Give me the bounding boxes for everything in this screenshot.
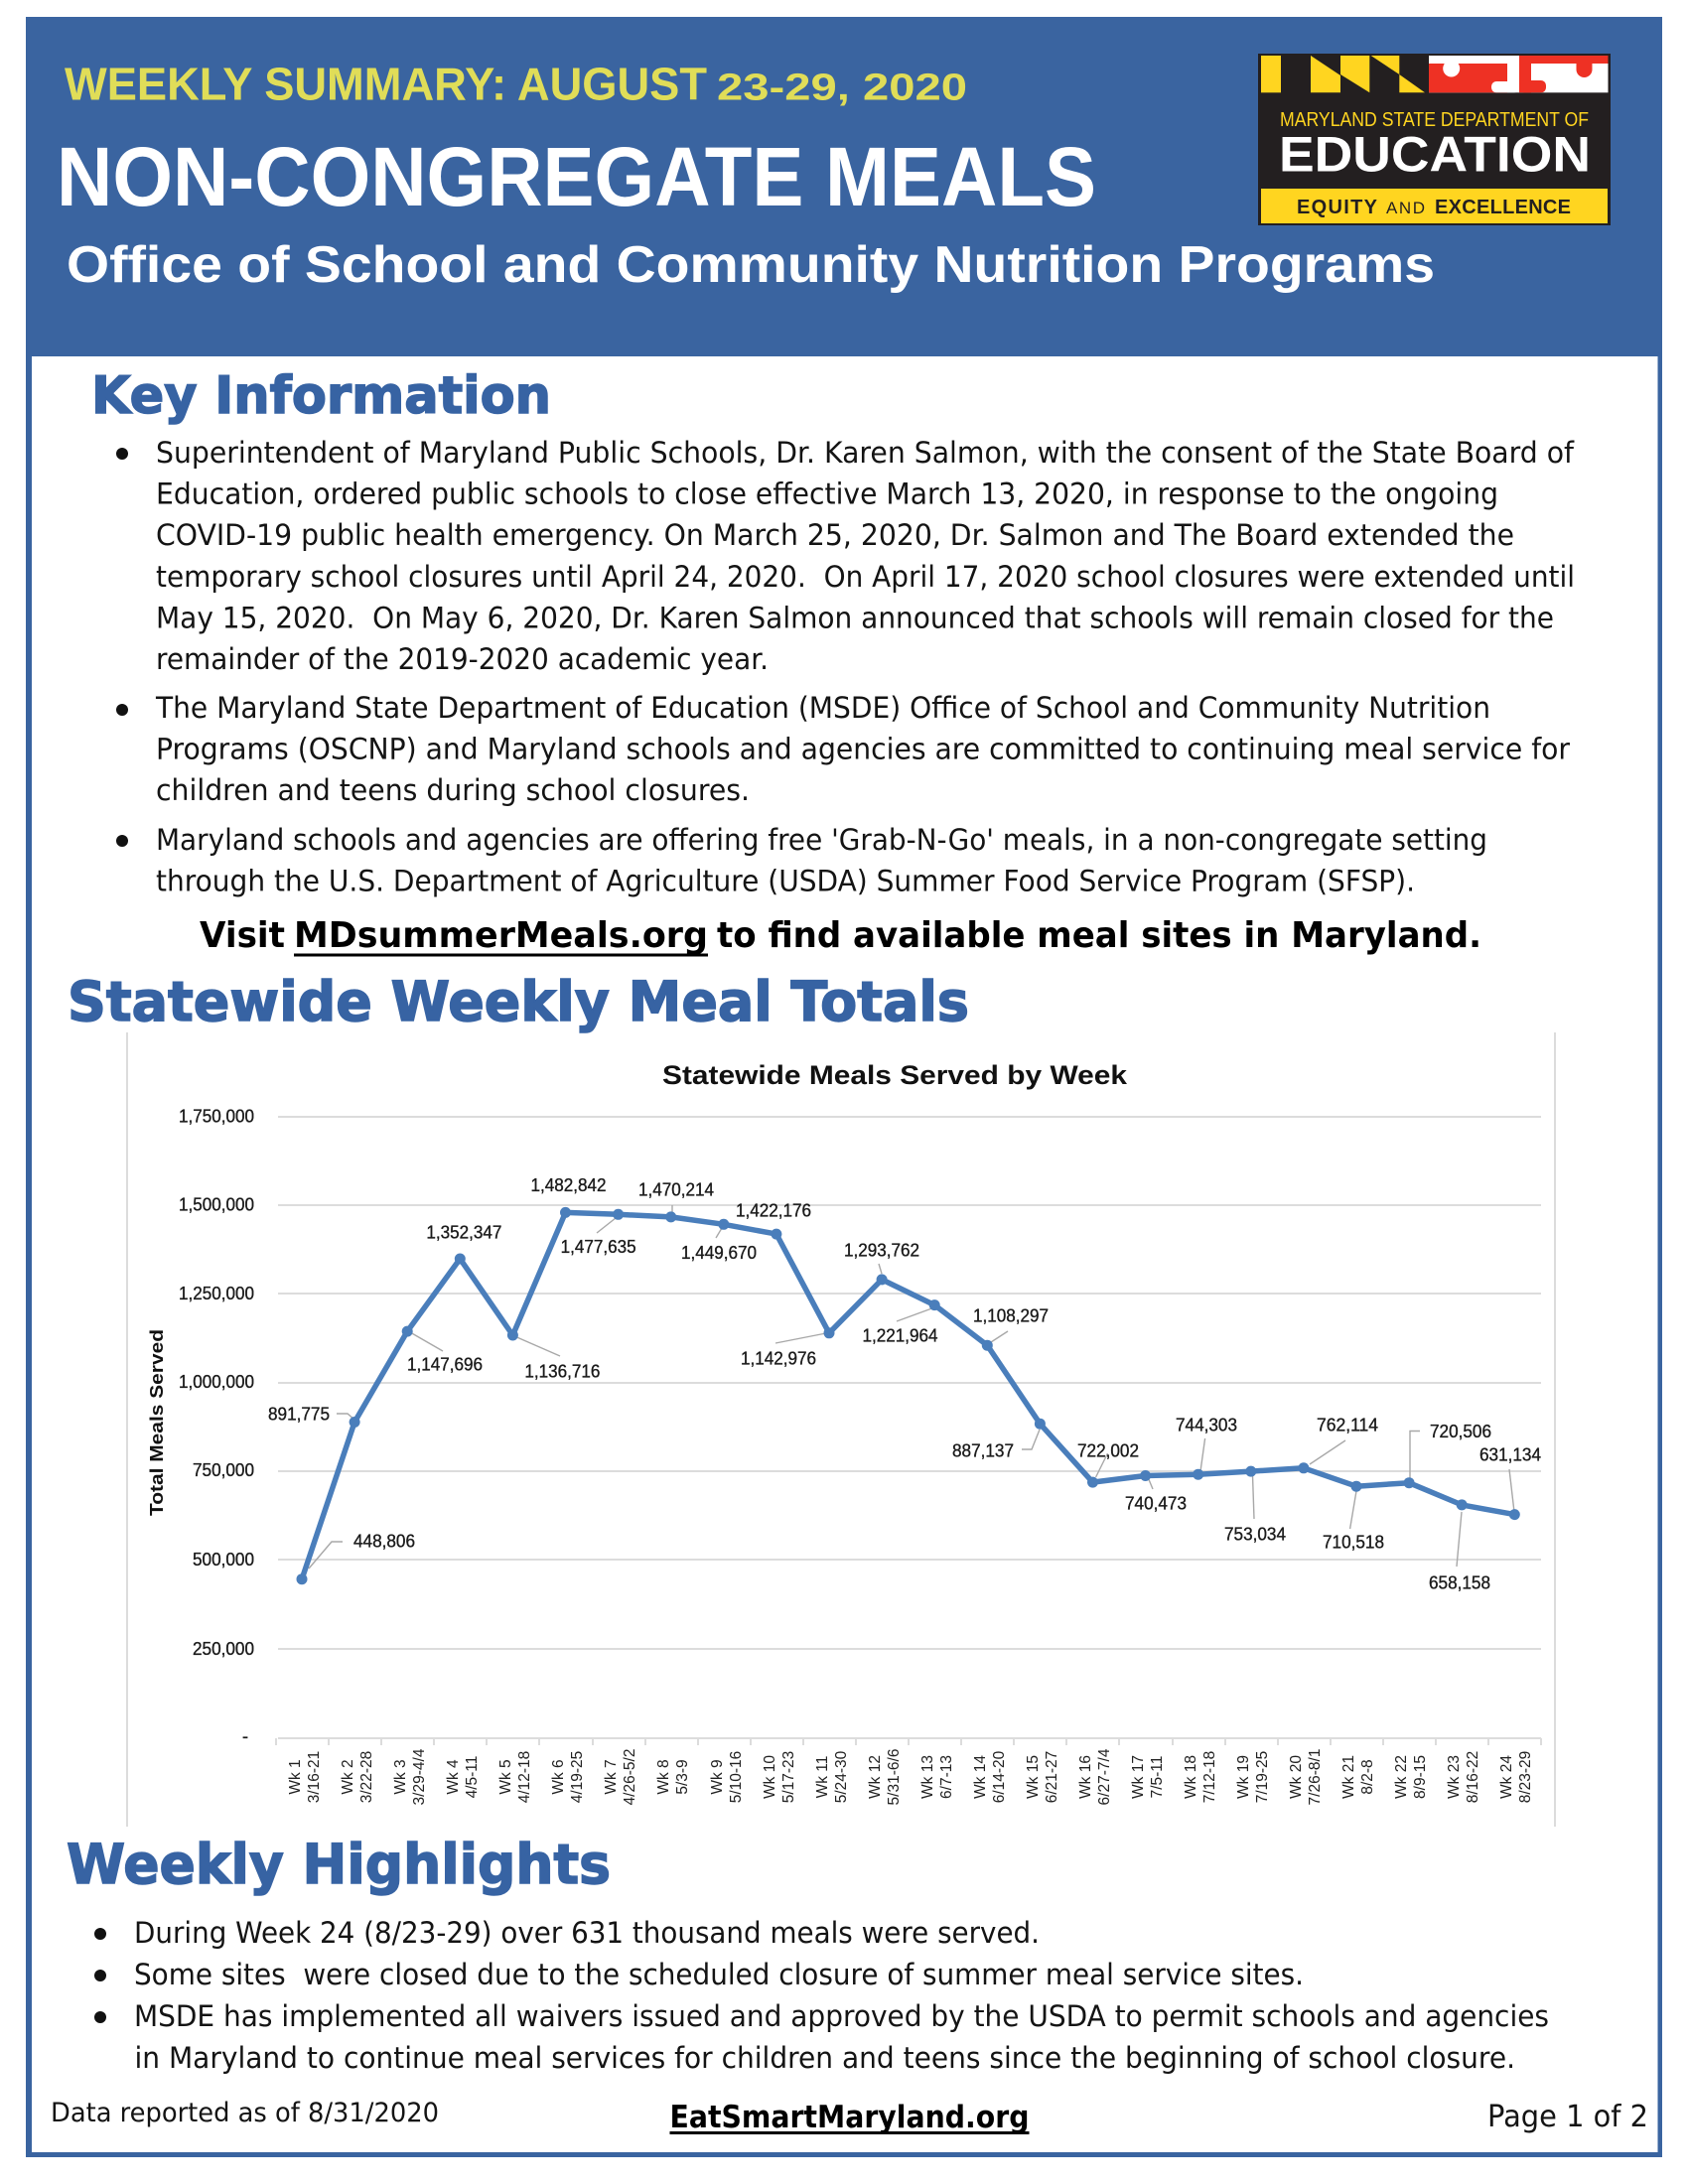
bullet: school closures: Education, ordered public schools to close effective March 13, 2020, in response to the ongoing xyxy=(156,478,1498,511)
data labels: 891,775 xyxy=(268,1404,330,1424)
y axis labels: 1,500,000 xyxy=(179,1195,254,1215)
data labels: 722,002 xyxy=(1077,1441,1139,1461)
data labels: 658,158 xyxy=(1429,1572,1490,1592)
highlight bullets: in Maryland to continue meal services for children and teens since the beginning of school closure. xyxy=(135,2041,1515,2075)
bullet: school closures: May 15, 2020. On May 6, 2020, Dr. Karen Salmon announced that schools will remain closed for the xyxy=(156,601,1554,634)
x axis labels: Wk 22 xyxy=(1393,1755,1410,1799)
data labels: 1,142,976 xyxy=(741,1348,816,1368)
logo: Maryland State Department of Education: MARYLAND STATE DEPARTMENT OF xyxy=(1280,108,1589,131)
y axis labels: 1,250,000 xyxy=(179,1284,254,1303)
x axis labels: Wk 7 xyxy=(603,1759,620,1795)
x axis labels: Wk 4 xyxy=(445,1759,462,1795)
x axis labels: Wk 9 xyxy=(709,1759,726,1795)
x axis labels: 5/31-6/6 xyxy=(886,1749,903,1805)
data date: Data reported as of 8/31/2020 xyxy=(51,2098,439,2128)
data labels: 887,137 xyxy=(952,1441,1014,1461)
data labels: 1,482,842 xyxy=(530,1175,606,1195)
data labels xyxy=(268,1175,1541,1592)
x axis labels: Wk 18 xyxy=(1183,1755,1199,1799)
x axis labels: Wk 3 xyxy=(392,1759,409,1795)
y axis labels xyxy=(179,1106,254,1746)
data labels: 1,293,762 xyxy=(844,1241,919,1261)
x axis labels: 5/3-9 xyxy=(674,1759,691,1795)
heading: weekly highlights: Weekly Highlights xyxy=(67,1833,611,1896)
data labels: 1,147,696 xyxy=(407,1354,483,1374)
chart title: Statewide Meals Served by Week xyxy=(662,1060,1128,1090)
logo: Maryland State Department of Education xyxy=(1258,54,1611,225)
y axis title: Total Meals Served xyxy=(147,1329,167,1516)
heading: statewide weekly meal totals: Statewide Weekly Meal Totals xyxy=(68,970,969,1033)
call to action: visit MDsummerMeals.org: to find available meal sites in Maryland. xyxy=(717,915,1481,956)
data line: meals served xyxy=(296,1207,1520,1584)
x axis labels: Wk 11 xyxy=(814,1756,831,1798)
bullet: MSDE commitment: Programs (OSCNP) and Maryland schools and agencies are committed to continuing meal service for xyxy=(156,733,1571,766)
x axis labels: 8/16-22 xyxy=(1465,1751,1481,1803)
x axis labels: Wk 14 xyxy=(972,1755,989,1799)
y axis labels: 1,750,000 xyxy=(179,1106,254,1126)
call to action: visit MDsummerMeals.org xyxy=(200,915,1481,957)
x axis labels: 6/27-7/4 xyxy=(1096,1748,1113,1805)
x axis labels: Wk 23 xyxy=(1446,1755,1463,1799)
x axis labels: 7/12-18 xyxy=(1201,1751,1218,1803)
x axis labels: 4/5-11 xyxy=(464,1756,481,1798)
bullet: MSDE commitment xyxy=(116,691,1571,807)
x axis labels xyxy=(287,1748,1534,1805)
bullet: school closures: COVID-19 public health emergency. On March 25, 2020, Dr. Salmon and The Board extended the xyxy=(156,518,1514,552)
data labels: 1,108,297 xyxy=(973,1306,1049,1326)
x axis labels: 8/2-8 xyxy=(1359,1759,1376,1795)
data labels: 744,303 xyxy=(1176,1416,1237,1435)
x axis labels: Wk 12 xyxy=(867,1755,884,1799)
data labels: 740,473 xyxy=(1125,1493,1187,1513)
x axis labels: 7/5-11 xyxy=(1149,1756,1166,1798)
x axis labels: Wk 2 xyxy=(340,1759,356,1795)
title: NON-CONGREGATE MEALS xyxy=(57,130,1096,223)
data labels: 1,221,964 xyxy=(862,1326,937,1346)
y axis labels: 500,000 xyxy=(193,1550,254,1570)
bullet: grab-n-go meals xyxy=(116,823,1487,897)
highlight bullets: MSDE has implemented all waivers issued and approved by the USDA to permit schools and agencies xyxy=(134,1999,1549,2033)
x axis labels: 5/24-30 xyxy=(833,1750,850,1803)
line chart: statewide meals served by week xyxy=(127,1032,1555,1827)
x axis labels: 7/26-8/1 xyxy=(1307,1749,1324,1805)
x axis labels: Wk 6 xyxy=(550,1759,567,1795)
logo: Maryland State Department of Education: EXCELLENCE xyxy=(1435,197,1571,218)
x axis labels: Wk 5 xyxy=(497,1759,514,1795)
bullet: grab-n-go meals: through the U.S. Department of Agriculture (USDA) Summer Food Service Program (SFSP). xyxy=(156,864,1415,897)
data labels: 1,449,670 xyxy=(681,1243,757,1263)
x axis labels: Wk 20 xyxy=(1288,1755,1305,1799)
logo: Maryland State Department of Education: EQUITY xyxy=(1297,197,1378,218)
y axis labels: 750,000 xyxy=(193,1460,254,1480)
highlight bullets xyxy=(94,1916,1549,2075)
x axis labels: Wk 10 xyxy=(762,1755,778,1799)
footer xyxy=(51,2098,1648,2135)
x axis labels: Wk 16 xyxy=(1077,1755,1094,1799)
x axis labels: 4/26-5/2 xyxy=(622,1749,638,1805)
x axis labels: Wk 21 xyxy=(1340,1755,1357,1799)
x axis labels: 5/10-16 xyxy=(728,1751,745,1803)
x axis labels: 6/7-13 xyxy=(938,1755,955,1799)
data labels: 753,034 xyxy=(1224,1525,1286,1545)
x axis labels: Wk 8 xyxy=(655,1759,672,1795)
x axis labels: 3/22-28 xyxy=(358,1751,375,1803)
highlight bullets: During Week 24 (8/23-29) over 631 thousand meals were served. xyxy=(134,1916,1040,1950)
bullet: school closures: temporary school closures until April 24, 2020. On April 17, 2020 school closures were extended until xyxy=(156,560,1575,594)
panel: key information xyxy=(91,366,1575,957)
bullet: school closures xyxy=(116,436,1575,676)
y axis labels: - xyxy=(242,1726,248,1746)
x axis labels: 6/14-20 xyxy=(991,1750,1008,1803)
heading: key information: Key Information xyxy=(91,366,551,426)
data labels: 448,806 xyxy=(353,1531,415,1551)
subtitle: Office of School and Community Nutrition Programs xyxy=(67,236,1435,294)
data labels: 720,506 xyxy=(1430,1422,1491,1441)
data labels: 1,352,347 xyxy=(426,1223,501,1243)
x axis labels: 5/17-23 xyxy=(780,1751,797,1803)
y axis labels: 1,000,000 xyxy=(179,1372,254,1392)
website link: EatSmartMaryland.org xyxy=(669,2100,1029,2135)
data labels: 762,114 xyxy=(1317,1416,1378,1435)
highlight bullets: Some sites were closed due to the scheduled closure of summer meal service sites. xyxy=(134,1958,1304,1991)
x axis labels: 6/21-27 xyxy=(1044,1751,1060,1803)
weekly summary date line: 23-29, 2020 xyxy=(717,68,967,109)
x axis labels: 7/19-25 xyxy=(1254,1751,1271,1803)
y axis labels: 250,000 xyxy=(193,1639,254,1659)
x axis labels: Wk 24 xyxy=(1498,1755,1515,1799)
bullet: school closures: remainder of the 2019-2020 academic year. xyxy=(156,642,769,676)
data labels: 1,477,635 xyxy=(561,1237,636,1257)
page number: Page 1 of 2 xyxy=(1487,2100,1648,2134)
call to action: visit MDsummerMeals.org: MDsummerMeals.org xyxy=(294,915,708,956)
header banner xyxy=(57,54,1611,294)
x axis labels: 4/19-25 xyxy=(569,1751,586,1803)
data labels: 631,134 xyxy=(1479,1445,1541,1465)
x axis labels: 8/9-15 xyxy=(1412,1755,1429,1799)
panel: weekly highlights xyxy=(67,1833,1549,2075)
bullet: school closures: Superintendent of Maryland Public Schools, Dr. Karen Salmon, with the consent of the State Board of xyxy=(156,436,1575,470)
bullet: MSDE commitment: The Maryland State Department of Education (MSDE) Office of School and Community Nutrition xyxy=(155,691,1490,725)
bullet: grab-n-go meals: Maryland schools and agencies are offering free 'Grab-N-Go' meals, in a non-congregate setting xyxy=(156,823,1487,857)
x axis labels: Wk 15 xyxy=(1025,1755,1042,1799)
x axis labels: 4/12-18 xyxy=(516,1751,533,1803)
x axis labels: Wk 13 xyxy=(919,1755,936,1799)
data labels: 1,422,176 xyxy=(736,1201,811,1221)
leader lines xyxy=(309,1205,1514,1569)
x axis labels: Wk 1 xyxy=(287,1759,304,1795)
x axis labels: 8/23-29 xyxy=(1517,1751,1534,1803)
weekly summary date line: WEEKLY SUMMARY: AUGUST xyxy=(65,58,707,109)
data labels: 1,136,716 xyxy=(524,1362,600,1382)
x axis labels: Wk 17 xyxy=(1130,1755,1147,1799)
data labels: 1,470,214 xyxy=(638,1179,714,1199)
logo: Maryland State Department of Education: EDUCATION xyxy=(1279,127,1591,183)
call to action: visit MDsummerMeals.org: Visit xyxy=(200,915,285,956)
logo: Maryland State Department of Education: AND xyxy=(1386,199,1425,217)
x axis labels: Wk 19 xyxy=(1235,1755,1252,1799)
data labels: 710,518 xyxy=(1323,1533,1384,1553)
bullet: MSDE commitment: children and teens during school closures. xyxy=(156,773,750,807)
x axis labels: 3/16-21 xyxy=(306,1751,323,1803)
x axis labels: 3/29-4/4 xyxy=(411,1748,428,1805)
